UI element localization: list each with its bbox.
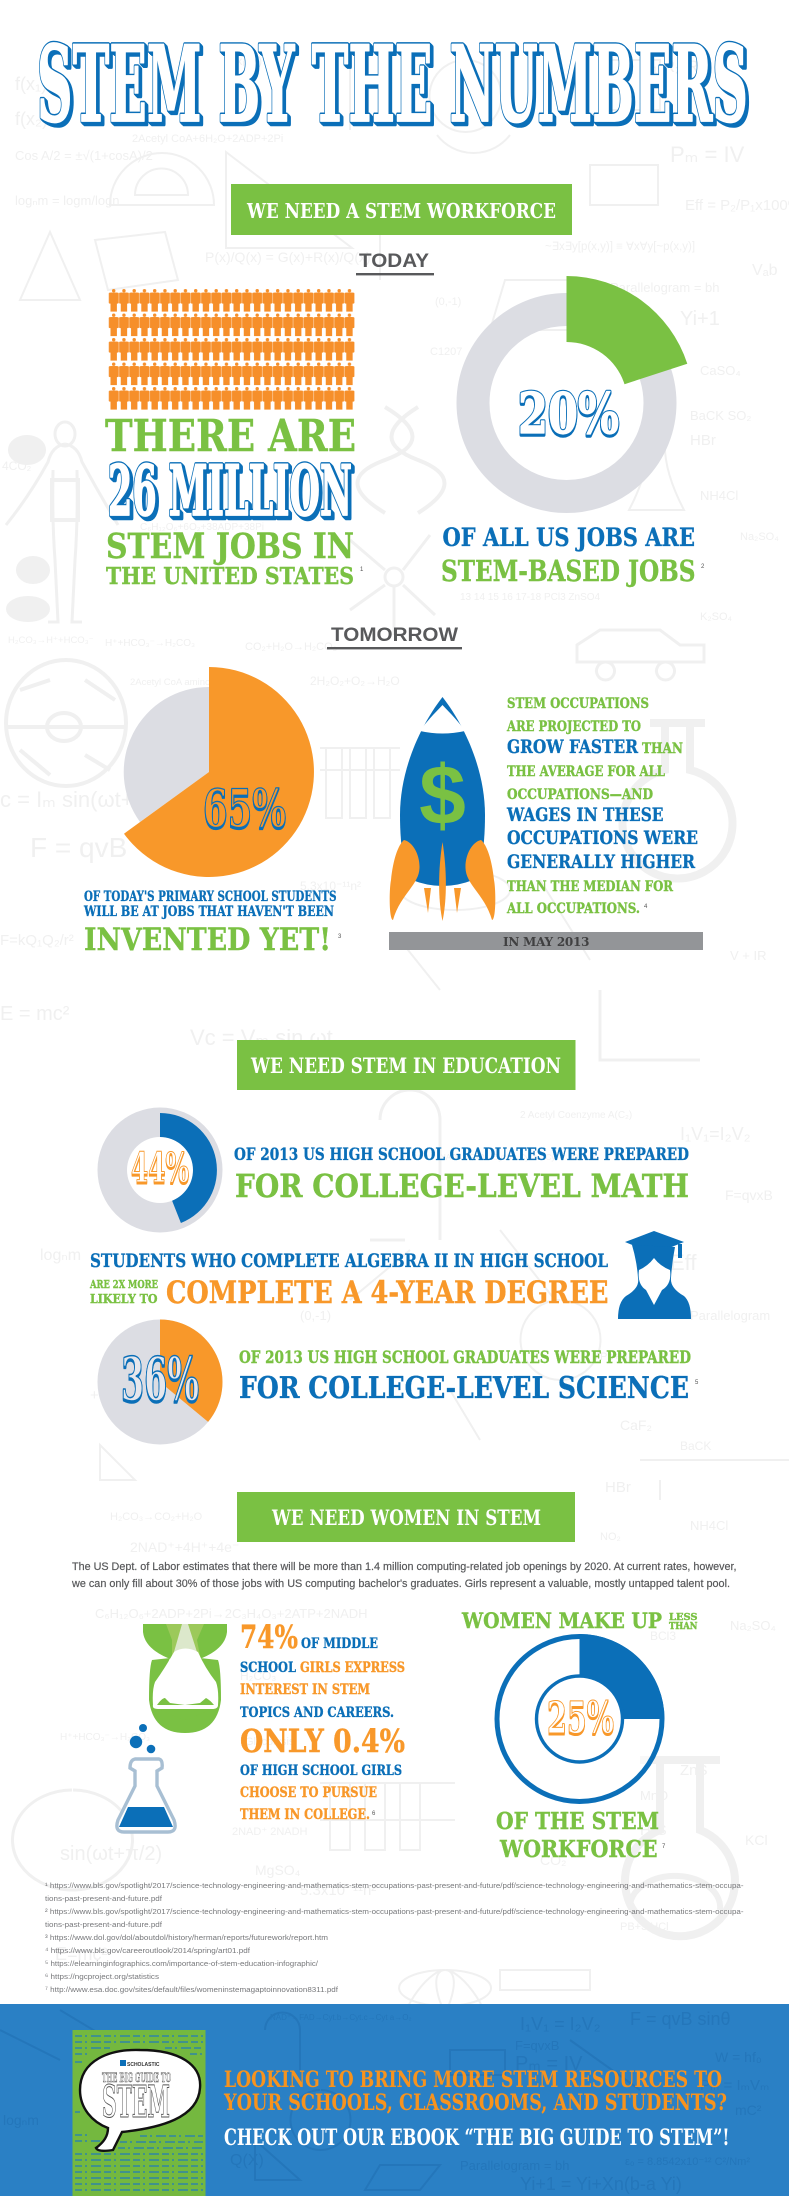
- ring chart: 25%: [497, 1634, 664, 1802]
- text block: occupations: STEM OCCUPATIONS: [507, 696, 649, 712]
- stat: algebra ii: COMPLETE A 4-YEAR DEGREE: [166, 1275, 608, 1311]
- background doodles lower section: I₁V₁=I₂V₂: [680, 1124, 751, 1144]
- stat: 26 million stem jobs: 26 MILLION: [108, 451, 352, 532]
- text block: middle school girls: 74%: [240, 1618, 298, 1656]
- text block: occupations: THAN: [642, 741, 683, 757]
- donut chart: 20%: [473, 276, 687, 496]
- ebook cover: THE BIG GUIDE TO: [102, 2071, 171, 2086]
- donut chart: 44%: [98, 1108, 222, 1232]
- footer background doodles: F = qvB sinθ: [630, 2009, 731, 2029]
- background doodles lower section: MgSO₄: [255, 1862, 301, 1878]
- footer background doodles: Q(X): [230, 2152, 264, 2169]
- text block: occupations: ARE PROJECTED TO: [506, 719, 641, 735]
- stat heading: women make up less than: LESS: [669, 1612, 698, 1623]
- footer background doodles: Pₘ = IV: [515, 2053, 583, 2075]
- background doodles lower section: H⁺+HCO₃⁻→H₂CO₃: [60, 1732, 150, 1743]
- background doodles lower section: CaF₂: [620, 1417, 652, 1433]
- stat: algebra ii: STUDENTS WHO COMPLETE ALGEBRA II IN HIGH SCHOOL: [90, 1250, 608, 1272]
- background doodles upper section: 2Acetyl CoA amino acid: [130, 677, 230, 688]
- stat: primary school students: WILL BE AT JOBS THAT HAVEN'T BEEN: [83, 904, 334, 920]
- stat: of the stem workforce: OF THE STEM: [496, 1807, 659, 1835]
- text block: middle school girls: ONLY 0.4%: [240, 1722, 405, 1760]
- background doodles lower section: Eff: [670, 1250, 697, 1275]
- background doodles lower section: NO₂: [600, 1531, 621, 1543]
- text block: occupations: 4: [644, 904, 648, 910]
- footer background doodles: Parallelogram = bh: [460, 2158, 569, 2173]
- background doodles upper section: 13 14 15 16 17-18 PCl3 ZnSO4: [460, 592, 601, 603]
- stat: primary school students: OF TODAY'S PRIMARY SCHOOL STUDENTS: [84, 889, 336, 905]
- donut chart: 20%: 20%: [518, 381, 619, 447]
- background doodles upper section: (0,-1): [435, 296, 461, 308]
- background doodles upper section: CO₂+H₂O→H₂CO₃: [245, 641, 337, 653]
- stat: algebra ii: ARE 2X MORE: [89, 1278, 158, 1291]
- background doodles lower section: logₙm: [40, 1247, 81, 1264]
- background doodles lower section: sin(ωt+π/2): [60, 1843, 162, 1865]
- text block: occupations: OCCUPATIONS—AND: [507, 787, 653, 803]
- background doodles lower section: KCl: [745, 1832, 768, 1848]
- intro paragraph: The US Dept. of Labor estimates that there will be more than 1.4 million computing-related job openings by 2020. At current rates, however,: [72, 1561, 736, 1573]
- background doodles lower section: +3O₂→HbO₂: [90, 1387, 176, 1404]
- stat: of the stem workforce: [496, 1807, 666, 1863]
- stat: 26 million stem jobs: 1: [360, 567, 364, 573]
- background doodles lower section: [13, 1090, 789, 2052]
- text block: occupations: [506, 696, 698, 917]
- background doodles upper section: Vₐb: [752, 262, 778, 279]
- background doodles upper section: 4CO₂: [2, 459, 32, 473]
- stat: all us jobs: 2: [701, 564, 705, 570]
- icon: rocket: [390, 697, 495, 921]
- section header: workforce: WE NEED A STEM WORKFORCE: [246, 199, 556, 223]
- stat: college-level math: [234, 1145, 689, 1205]
- pie chart: 65%: 65%: [203, 779, 286, 840]
- background doodles upper section: Yi+1: [680, 308, 720, 330]
- text block: middle school girls: 6: [372, 1811, 376, 1817]
- intro paragraph: [71, 1561, 737, 1590]
- icon: rocket: $: [419, 748, 466, 842]
- footnotes: ⁴ https://www.bls.gov/careeroutlook/2014/spring/art01.pdf: [45, 1946, 251, 1955]
- background doodles upper section: NH4Cl: [700, 488, 738, 503]
- footnotes: [45, 1881, 744, 1994]
- stat: primary school students: [83, 889, 342, 958]
- background doodles lower section: Parallelogram: [690, 1308, 770, 1323]
- pie chart: 65%: [124, 667, 314, 877]
- pie chart: 36%: [98, 1320, 222, 1444]
- background doodles upper section: BaCK SO₂: [690, 408, 751, 423]
- stat: college-level science: 5: [695, 1380, 699, 1386]
- background doodles upper section: logₙm = logm/logn: [15, 193, 120, 208]
- text block: occupations: ALL OCCUPATIONS.: [506, 901, 640, 917]
- stat heading: women make up less than: WOMEN MAKE UP: [461, 1608, 662, 1633]
- stat: all us jobs: [441, 523, 705, 588]
- icon: flask with bubbles: [117, 1724, 175, 1832]
- footnotes: tions-past-present-and-future.pdf: [45, 1920, 163, 1929]
- background doodles upper section: R₁ R₂ R₃: [640, 57, 706, 76]
- text block: middle school girls: [240, 1618, 405, 1823]
- background doodles lower section: (0,-1): [300, 1308, 331, 1323]
- background doodles lower section: Glycolysis: [245, 1736, 295, 1748]
- background doodles lower section: NAD⁺→FAD→Cyt.b→Cyt.c→Cyt a→O₂: [440, 1153, 582, 1162]
- footer background doodles: Yi+1 = Yi+Xn(b-a Yi): [520, 2174, 682, 2194]
- background doodles upper section: ~∃x∃y[p(x,y)] ≡ ∀x∀y[~p(x,y)]: [545, 241, 695, 253]
- footnotes: ¹ https://www.bls.gov/spotlight/2017/science-technology-engineering-and-mathematics-stem-occupations-past-present-and-future/pdf/science-technology-engineering-and-mathematics-stem-occupa-: [45, 1881, 744, 1890]
- text block: middle school girls: TOPICS AND CAREERS.: [240, 1705, 394, 1721]
- background doodles upper section: P(x)/Q(x) = G(x)+R(x)/Q(x): [205, 249, 371, 265]
- text block: middle school girls: CHOOSE TO PURSUE: [240, 1785, 377, 1801]
- ring chart: 25%: 25%: [547, 1693, 614, 1744]
- date bar: in may 2013: [389, 932, 703, 950]
- stat: 26 million stem jobs: 26 MILLION: [108, 451, 352, 532]
- text block: occupations: GENERALLY HIGHER: [507, 851, 695, 873]
- text block: occupations: WAGES IN THESE: [506, 804, 664, 826]
- background doodles upper section: C₆H₁₂O₆+6O₂+38ADP+38Pi: [140, 522, 264, 533]
- background doodles upper section: 2Acetyl CoA+6H₂O+2ADP+2Pi: [132, 133, 283, 145]
- background doodles lower section: 5.3x10⁻¹¹n²: [300, 1882, 376, 1899]
- footnotes: ³ https://www.dol.gov/dol/aboutdol/history/herman/reports/futurework/report.htm: [45, 1933, 328, 1942]
- text block: middle school girls: INTEREST IN STEM: [240, 1682, 370, 1698]
- background doodles upper section: [0, 54, 789, 1060]
- stat: college-level science: OF 2013 US HIGH SCHOOL GRADUATES WERE PREPARED: [239, 1348, 691, 1367]
- background doodles lower section: 2NAD⁺+4H⁺+4e⁻: [130, 1539, 239, 1555]
- text block: middle school girls: THEM IN COLLEGE.: [240, 1807, 370, 1823]
- text block: occupations: GROW FASTER: [507, 736, 638, 758]
- background doodles upper section: H₂CO₃→H⁺+HCO₃⁻: [8, 635, 94, 646]
- background doodles lower section: Pb+H₂: [600, 1351, 632, 1363]
- background doodles upper section: SiCl₄: [385, 1037, 417, 1053]
- footnotes: ⁷ http://www.esa.doc.gov/sites/default/files/womeninstemagaptoinnovation8311.pdf: [45, 1985, 339, 1994]
- footer call to action: [223, 2067, 729, 2151]
- intro paragraph: we can only fill about 30% of those jobs with US computing bachelor's graduates. Girls represent a valuable, mostly untapped talent pool.: [71, 1578, 730, 1590]
- background doodles upper section: HBr: [690, 432, 716, 449]
- footer background doodles: Pₘ = IₘVₘ: [700, 2077, 769, 2094]
- background doodles lower section: P(x)/Q(x): [140, 1332, 205, 1349]
- date bar: in may 2013: IN MAY 2013: [503, 935, 590, 949]
- background doodles upper section: C1207: [430, 346, 462, 358]
- footer background doodles: mC²: [735, 2102, 762, 2118]
- text block: middle school girls: GIRLS EXPRESS: [300, 1660, 405, 1676]
- icon: girl reading with mortarboard: [143, 1624, 227, 1733]
- background doodles upper section: V + IR: [730, 948, 766, 963]
- background doodles lower section: CO₂: [540, 1852, 566, 1868]
- stat: college-level science: FOR COLLEGE-LEVEL SCIENCE: [239, 1371, 689, 1406]
- background doodles upper section: Parallelogram = bh: [610, 280, 719, 295]
- footnotes: ⁶ https://ngcproject.org/statistics: [45, 1972, 159, 1981]
- background doodles lower section: H₂S: [640, 1822, 667, 1839]
- footer background doodles: ε₀ = 8.8542x10⁻¹² C²/Nm²: [625, 2156, 750, 2168]
- background doodles lower section: H₂CO₃→CO₂+H₂O: [110, 1511, 203, 1523]
- stat: college-level science: [239, 1348, 699, 1406]
- footer background doodles: F=qvxB: [515, 2038, 559, 2053]
- subheading: today: TODAY: [359, 251, 429, 272]
- background doodles lower section: Na₂SO₄: [730, 1618, 776, 1633]
- stat: 26 million stem jobs: THERE ARE: [105, 411, 356, 462]
- footer background doodles: [0, 2009, 769, 2194]
- background doodles lower section: E=mc²: [55, 1944, 108, 1964]
- ebook cover: SCHOLASTIC: [127, 2062, 160, 2068]
- section header: education: WE NEED STEM IN EDUCATION: [250, 1053, 561, 1078]
- background doodles upper section: CaSO₄: [700, 363, 741, 378]
- text block: occupations: THE AVERAGE FOR ALL: [507, 764, 665, 780]
- donut chart: 44%: 44%: [131, 1144, 189, 1192]
- donut chart: 20%: 20%: [518, 381, 619, 447]
- text block: middle school girls: OF MIDDLE: [301, 1636, 378, 1652]
- background doodles lower section: ZnS: [680, 1762, 708, 1779]
- stat: of the stem workforce: 7: [662, 1844, 666, 1850]
- background doodles upper section: f(x₁): [15, 74, 47, 94]
- stat: algebra ii: [89, 1250, 609, 1311]
- stat: all us jobs: OF ALL US JOBS ARE: [442, 523, 695, 552]
- background doodles lower section: 2NAD⁺ 2NADH: [232, 1826, 308, 1838]
- footer band: [0, 2004, 789, 2196]
- section header: women: WE NEED WOMEN IN STEM: [271, 1505, 541, 1530]
- background doodles lower section: BCl3: [650, 1629, 676, 1643]
- text block: occupations: OCCUPATIONS WERE: [507, 827, 698, 849]
- background doodles upper section: F = qvB: [30, 832, 127, 863]
- subheading: tomorrow: TOMORROW: [331, 625, 458, 646]
- stat: 26 million stem jobs: STEM JOBS IN: [106, 526, 354, 567]
- ebook cover: STEM: [102, 2077, 170, 2128]
- background doodles lower section: 2 Acetyl Coenzyme A(C₂): [520, 1110, 632, 1121]
- footer background doodles: NAD⁺→FAD→Cyt.b→Cyt.c→Cyt a→O₂: [270, 2013, 412, 2022]
- background doodles lower section: H₂CO₃: [240, 1669, 276, 1683]
- footnotes: ² https://www.bls.gov/spotlight/2017/science-technology-engineering-and-mathematics-stem-occupations-past-present-and-future/pdf/science-technology-engineering-and-mathematics-stem-occupa-: [45, 1907, 744, 1916]
- footer background doodles: I₁V₁ = I₂V₂: [520, 2014, 601, 2034]
- background doodles upper section: Σ(xᵢ,xₛ): [225, 54, 262, 68]
- background doodles upper section: E = mc²: [0, 1003, 70, 1025]
- background doodles upper section: f(x₂): [15, 109, 48, 129]
- background doodles upper section: Vc = Vₘ sin ωt: [190, 1025, 333, 1050]
- text block: middle school girls: OF HIGH SCHOOL GIRLS: [240, 1763, 402, 1779]
- pie chart: 36%: 36%: [121, 1345, 199, 1415]
- icon: graduate: [618, 1231, 691, 1319]
- footer background doodles: logₙm: [3, 2112, 39, 2128]
- stat: college-level math: OF 2013 US HIGH SCHOOL GRADUATES WERE PREPARED: [234, 1145, 689, 1164]
- background doodles lower section: NH4Cl: [690, 1518, 728, 1533]
- background doodles lower section: MnO: [640, 1788, 668, 1803]
- background doodles upper section: 5.3x10⁻¹¹n²: [300, 879, 361, 893]
- background doodles lower section: PB+3 HCl: [620, 1921, 669, 1933]
- people icon grid: [109, 289, 355, 412]
- stat: all us jobs: STEM-BASED JOBS: [441, 554, 696, 588]
- ebook cover: [72, 2030, 206, 2196]
- background doodles upper section: Cos A/2 = ±√(1+cosA)/2: [15, 148, 153, 163]
- footnotes: tions-past-present-and-future.pdf: [45, 1894, 163, 1903]
- text block: occupations: THAN THE MEDIAN FOR: [507, 879, 673, 895]
- background doodles lower section: BaCK: [680, 1439, 711, 1453]
- background doodles upper section: K₂SO₄: [700, 611, 732, 623]
- stat: of the stem workforce: WORKFORCE: [499, 1835, 658, 1863]
- background doodles upper section: Na₂SO₄: [740, 531, 779, 543]
- footnotes: ⁵ https://elearninginfographics.com/importance-of-stem-education-infographic/: [45, 1959, 319, 1968]
- background doodles lower section: F=qvxB: [725, 1187, 773, 1203]
- text block: middle school girls: SCHOOL: [240, 1660, 296, 1676]
- background doodles upper section: c = Iₘ sin(ωt+π/2): [0, 787, 174, 812]
- stat: 26 million stem jobs: [105, 411, 364, 590]
- stat: algebra ii: LIKELY TO: [90, 1292, 158, 1306]
- background doodles upper section: 2H₂O₂+O₂→H₂O: [310, 674, 400, 688]
- background doodles upper section: F=kQ₁Q₂/r²: [0, 932, 74, 949]
- background doodles upper section: Pₘ = IV: [670, 142, 745, 167]
- background doodles lower section: C₆H₁₂O₆+2ADP+2Pi→2C₃H₄O₃+2ATP+2NADH: [95, 1606, 368, 1621]
- section header: women: [237, 1492, 575, 1542]
- stat: college-level math: FOR COLLEGE-LEVEL MATH: [235, 1167, 689, 1205]
- footer background doodles: W = hf₀: [715, 2049, 762, 2065]
- section header: workforce: [231, 184, 572, 235]
- section header: education: [237, 1040, 576, 1090]
- background doodles upper section: H⁺+HCO₃⁻→H₂CO₃: [105, 638, 195, 649]
- stat: primary school students: 3: [338, 934, 342, 940]
- background doodles lower section: HBr: [605, 1479, 631, 1496]
- stat: 26 million stem jobs: THE UNITED STATES: [106, 562, 354, 590]
- stat heading: women make up less than: THAN: [669, 1621, 698, 1632]
- stat: primary school students: INVENTED YET!: [84, 922, 331, 958]
